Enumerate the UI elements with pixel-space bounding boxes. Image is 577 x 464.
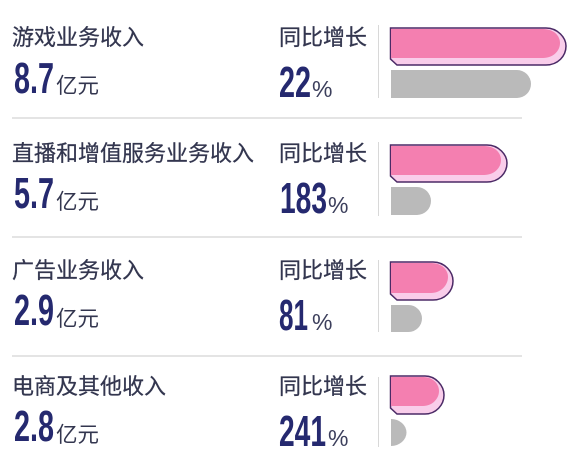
bar: previous	[391, 187, 431, 215]
unit: 亿元	[56, 74, 99, 98]
growth value: 81%: %	[312, 309, 332, 335]
unit: 亿元	[56, 423, 99, 447]
row: advertising revenue	[12, 258, 453, 340]
growth value: 183%: 183	[280, 174, 327, 223]
label: ecommerce and other revenue: 电商及其他收入	[12, 374, 166, 399]
bar: current	[390, 28, 566, 65]
value: 2.9: 2.9	[14, 286, 54, 335]
bar: previous	[391, 305, 422, 332]
bar: current	[390, 145, 507, 182]
row: game revenue	[12, 25, 566, 107]
unit: 亿元	[56, 307, 99, 331]
row: ecommerce and other revenue	[12, 374, 444, 456]
label: live streaming revenue: 直播和增值服务业务收入	[12, 141, 254, 166]
growth value: 22%: %	[312, 76, 332, 102]
value: 8.7: 8.7	[14, 54, 54, 103]
bar: previous	[391, 419, 406, 446]
unit: 亿元	[56, 190, 99, 214]
growth value: 241%: %	[328, 425, 348, 451]
value: 5.7: 5.7	[14, 169, 54, 218]
bar: previous	[391, 70, 531, 98]
label: growth: 同比增长	[279, 258, 367, 283]
bar: current	[390, 376, 444, 414]
growth value: 183%: %	[328, 192, 348, 218]
label: growth: 同比增长	[279, 25, 367, 50]
row: live streaming revenue	[12, 141, 507, 223]
value: 2.8: 2.8	[14, 402, 54, 451]
label: advertising revenue: 广告业务收入	[12, 258, 144, 283]
growth value: 22%: 22	[279, 58, 311, 107]
label: growth: 同比增长	[279, 374, 367, 399]
label: growth: 同比增长	[279, 141, 367, 166]
growth value: 81%: 81	[279, 291, 308, 340]
label: game revenue: 游戏业务收入	[12, 25, 144, 50]
bar: current	[390, 262, 453, 300]
growth value: 241%: 241	[279, 407, 326, 456]
